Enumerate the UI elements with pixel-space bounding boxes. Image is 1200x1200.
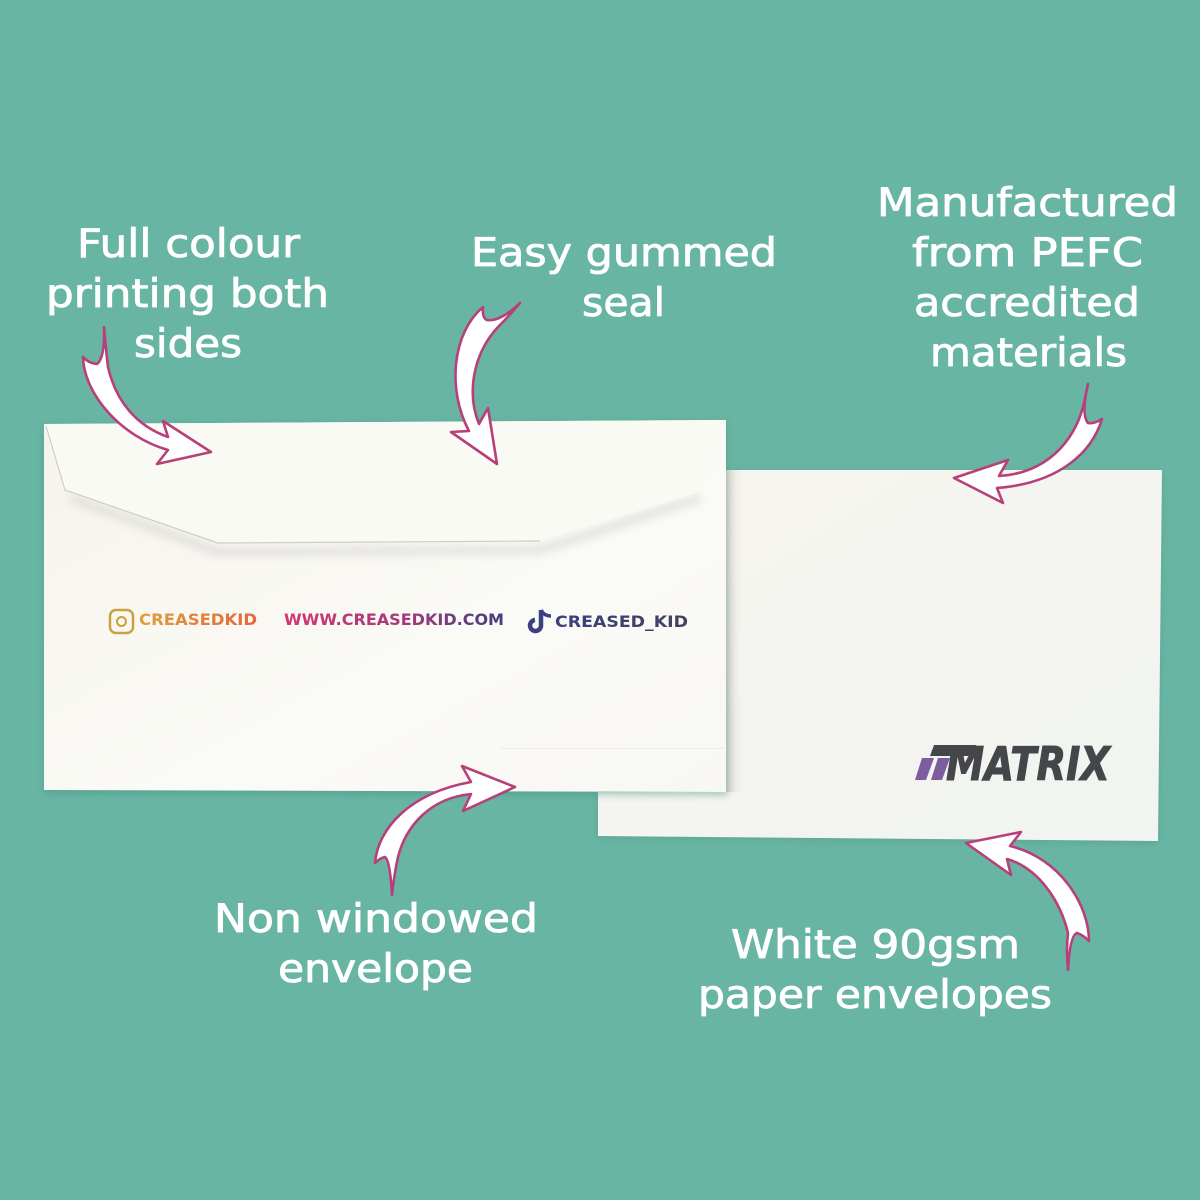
website address: WWW.CREASEDKID.COM <box>284 610 504 629</box>
label: non windowed envelope <box>214 897 538 992</box>
label: white 90gsm paper: paper envelopes <box>698 973 1052 1018</box>
social handle: TikTok: CREASED_KID <box>555 612 688 631</box>
label: PEFC materials: materials <box>930 331 1127 376</box>
envelope flap <box>44 420 726 543</box>
label: PEFC materials: Manufactured <box>877 181 1178 226</box>
arrow: to PEFC envelope <box>954 384 1102 503</box>
arrow: to full colour printing <box>83 327 211 464</box>
label: full colour printing: Full colour <box>77 222 301 267</box>
arrow: to gummed seal <box>451 303 520 464</box>
label: easy gummed seal: seal <box>582 281 665 326</box>
label: PEFC materials: accredited <box>914 281 1140 326</box>
arrow: to non windowed envelope <box>375 766 515 895</box>
flap shadow <box>70 498 700 552</box>
social handle: Instagram: CREASEDKID <box>139 610 257 629</box>
label: white 90gsm paper: White 90gsm <box>731 923 1020 968</box>
envelope: back with flap and printed details <box>44 420 728 795</box>
logo: Matrix: MATRIX <box>946 737 1112 791</box>
label: full colour printing: sides <box>134 322 242 367</box>
label: easy gummed seal: Easy gummed <box>471 231 777 276</box>
label: PEFC materials <box>877 181 1178 376</box>
label: PEFC materials: from PEFC <box>912 231 1143 276</box>
envelope: front with Matrix logo <box>598 470 1162 843</box>
label: white 90gsm paper <box>698 923 1052 1018</box>
arrow: to white paper envelope <box>966 832 1089 970</box>
label: non windowed envelope: Non windowed <box>214 897 538 942</box>
social handle: Instagram <box>110 610 257 633</box>
label: easy gummed seal <box>471 231 777 326</box>
label: full colour printing <box>46 222 329 367</box>
label: full colour printing: printing both <box>46 272 329 317</box>
label: non windowed envelope: envelope <box>278 947 473 992</box>
